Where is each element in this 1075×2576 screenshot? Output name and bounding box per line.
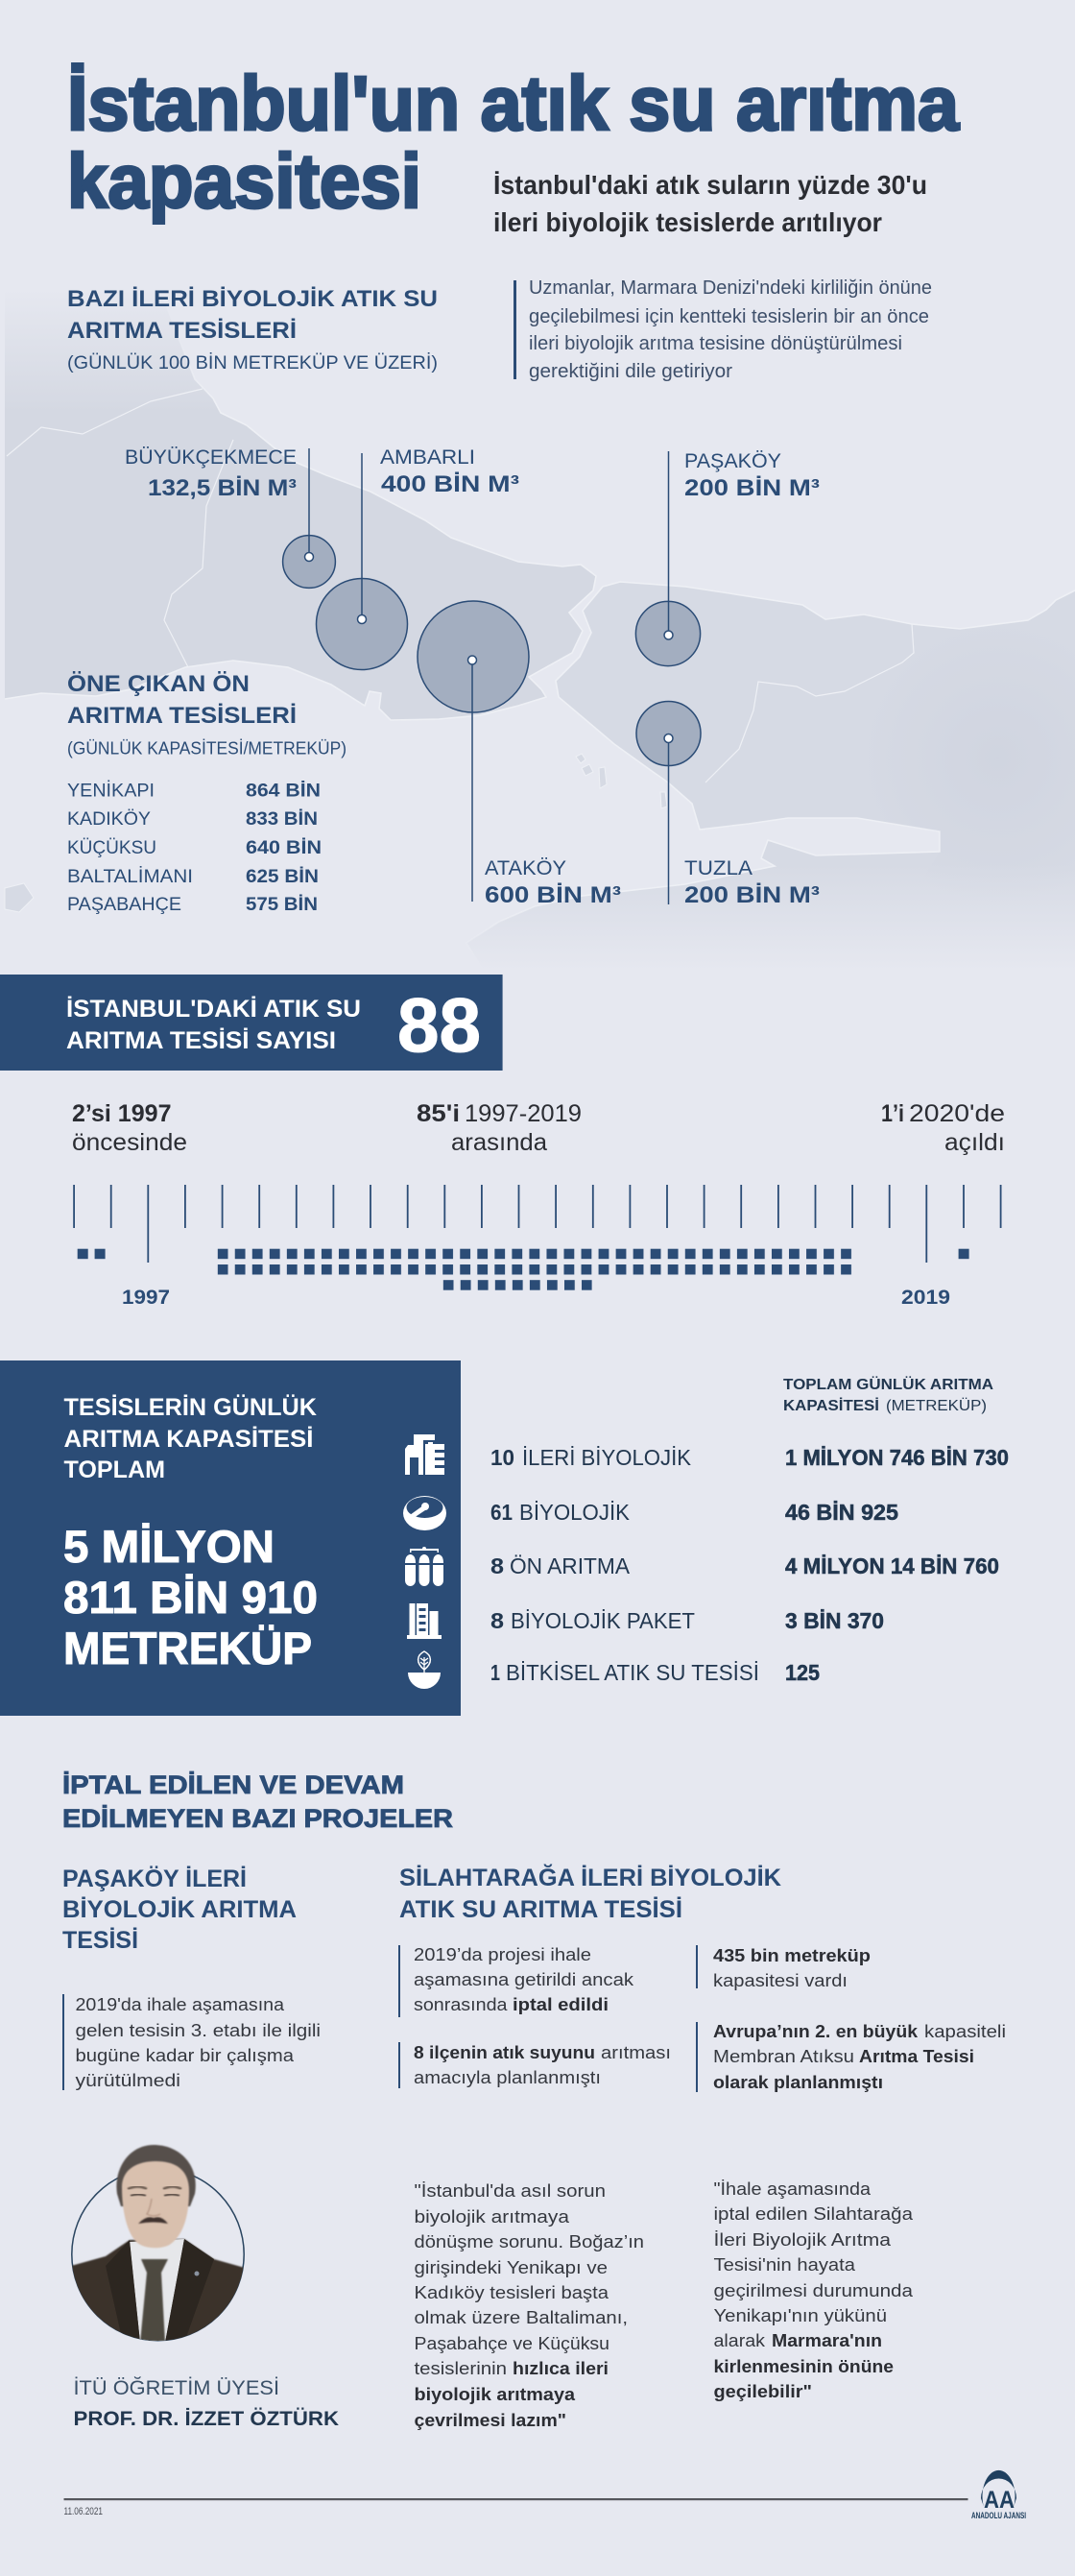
timeline ticks	[74, 1185, 1001, 1263]
note: cancelled tender: 2019’da projesi ihale	[414, 1945, 591, 1964]
timeline captions: 2020'de	[909, 1100, 1005, 1127]
quote 2	[714, 2179, 914, 2401]
marker: Ambarlı: 400 BİN M³	[381, 471, 519, 497]
quote 1: tesislerinin	[415, 2359, 507, 2378]
note: cancelled tender: aşamasına getirildi ancak	[414, 1970, 634, 1989]
quote 1	[415, 2181, 644, 2430]
person name: PROF. DR. İZZET ÖZTÜRK	[73, 2408, 339, 2430]
panel: Paşaköy project: 2019'da ihale aşamasına	[75, 1995, 285, 2014]
panel: pre-treatment plants: 864 BİN	[246, 782, 321, 801]
quote 1: çevrilmesi lazım"	[415, 2411, 566, 2430]
table row values: 1 MİLYON 746 BİN 730	[785, 1445, 1009, 1470]
callout: experts paragraph	[514, 277, 932, 382]
panel: pre-treatment plants: 833 BİN	[246, 809, 318, 830]
note: capacity: kapasitesi vardı	[713, 1971, 848, 1990]
panel: total daily capacity: TESİSLERİN GÜNLÜK	[63, 1393, 317, 1421]
note: Europe's second largest: kapasiteli	[924, 2022, 1006, 2041]
heading: cancelled projects	[62, 1770, 453, 1833]
timeline	[72, 1100, 1005, 1309]
table header: (METREKÜP)	[886, 1397, 987, 1414]
panel: Paşaköy project: BİYOLOJİK ARITMA	[62, 1896, 297, 1923]
panel: pre-treatment plants: ARITMA TESİSLERİ	[67, 703, 297, 729]
quote 1: dönüşme sorunu. Boğaz’ın	[415, 2232, 644, 2251]
table row labels: İLERİ BİYOLOJİK	[522, 1445, 692, 1470]
note: eight districts: amacıyla planlanmıştı	[414, 2068, 601, 2087]
heading: advanced biological plants	[67, 286, 438, 373]
quote 2: Tesisi'nin hayata	[714, 2255, 856, 2275]
note: Europe's second largest: Arıtma Tesisi	[859, 2047, 974, 2066]
note: Europe's second largest: Avrupa’nın 2. en büyük	[713, 2022, 919, 2041]
marker: Ataköy: ATAKÖY	[485, 857, 566, 879]
panel: total daily capacity: ARITMA KAPASİTESİ	[63, 1426, 313, 1453]
timeline captions: 2’si 1997	[72, 1100, 171, 1127]
note: eight districts: arıtması	[601, 2043, 671, 2062]
panel: Silahtarağa project: ATIK SU ARITMA TESİSİ	[399, 1896, 682, 1923]
table row values: 3 BİN 370	[785, 1608, 884, 1633]
panel: number of plants banner: İSTANBUL'DAKİ ATIK SU	[66, 996, 361, 1023]
marker: Paşaköy: 200 BİN M³	[684, 475, 820, 501]
panel: pre-treatment plants: (GÜNLÜK KAPASİTESİ/METREKÜP)	[67, 739, 346, 758]
panel: Paşaköy project: TESİSİ	[62, 1927, 138, 1954]
panel: Paşaköy project: bugüne kadar bir çalışma	[75, 2046, 295, 2065]
callout: experts paragraph: gerektiğini dile getiriyor	[529, 361, 732, 382]
table: plant types and capacities	[490, 1375, 1009, 1685]
note: eight districts: 8 ilçenin atık suyunu	[414, 2043, 595, 2062]
marker: Ambarlı: AMBARLI	[380, 446, 475, 469]
icon: biological package plant	[407, 1603, 442, 1639]
note: eight districts	[398, 2042, 671, 2088]
panel: total daily capacity: METREKÜP	[63, 1623, 312, 1673]
quote 1: "İstanbul'da asıl sorun	[415, 2181, 606, 2201]
note: cancelled tender: iptal edildi	[513, 1995, 609, 2014]
table row labels: BİTKİSEL ATIK SU TESİSİ	[506, 1660, 759, 1685]
quote 2: İleri Biyolojik Arıtma	[714, 2230, 892, 2250]
marker: Büyükçekmece	[125, 446, 335, 588]
marker: Tuzla: 200 BİN M³	[684, 882, 820, 908]
quote 2: geçirilmesi durumunda	[714, 2281, 914, 2300]
person name	[73, 2377, 339, 2430]
subtitle: ileri biyolojik tesislerde arıtılıyor	[493, 207, 882, 237]
marker: Paşaköy	[635, 450, 820, 666]
table row labels: 8	[490, 1608, 504, 1633]
heading: advanced biological plants: ARITMA TESİSLERİ	[67, 318, 297, 344]
person name: İTÜ ÖĞRETİM ÜYESİ	[73, 2377, 279, 2399]
panel: pre-treatment plants: ÖNE ÇIKAN ÖN	[67, 671, 250, 697]
panel: total daily capacity: 5 MİLYON	[63, 1521, 275, 1572]
panel: number of plants banner	[0, 975, 503, 1071]
timeline captions: 1997-2019	[465, 1100, 582, 1127]
table row labels: 61	[490, 1500, 513, 1525]
panel: number of plants banner: 88	[397, 982, 481, 1068]
logo: Anadolu Ajansı: ANADOLU AJANSI	[971, 2511, 1026, 2520]
panel: pre-treatment plants: PAŞABAHÇE	[67, 895, 181, 915]
table row values	[785, 1445, 1009, 1685]
panel: total daily capacity	[0, 1360, 461, 1716]
note: cancelled tender: sonrasında	[414, 1995, 509, 2014]
quote 2: "İhale aşamasında	[714, 2179, 872, 2199]
callout: experts paragraph: Uzmanlar, Marmara Denizi'ndeki kirliliğin önüne	[529, 277, 932, 299]
timeline years: 2019	[901, 1287, 950, 1309]
table row labels: ÖN ARITMA	[510, 1553, 631, 1578]
quote 1: hızlıca ileri	[513, 2359, 609, 2378]
callout: experts paragraph: ileri biyolojik arıtma tesisine dönüştürülmesi	[529, 333, 902, 354]
quote 1: Paşabahçe ve Küçüksu	[415, 2334, 609, 2353]
icon: advanced biological plant	[405, 1434, 444, 1475]
quote 2: geçilebilir"	[714, 2382, 812, 2401]
table row labels: 10	[490, 1445, 514, 1470]
table row labels: 1	[490, 1660, 500, 1685]
timeline captions: 85'i	[417, 1100, 460, 1127]
table header: KAPASİTESİ	[783, 1397, 879, 1414]
timeline years: 1997	[122, 1287, 170, 1309]
title	[67, 60, 959, 224]
timeline captions: arasında	[451, 1129, 547, 1156]
quote 1: girişindeki Yenikapı ve	[415, 2258, 608, 2277]
table header	[783, 1375, 993, 1414]
quote 2: Yenikapı'nın yükünü	[714, 2306, 887, 2325]
marker: Tuzla: TUZLA	[684, 857, 752, 879]
panel: Silahtarağa project: SİLAHTARAĞA İLERİ BİYOLOJİK	[399, 1864, 781, 1891]
footer rule	[63, 2498, 968, 2500]
heading: cancelled projects: EDİLMEYEN BAZI PROJELER	[62, 1804, 453, 1833]
quote 2: kirlenmesinin önüne	[714, 2357, 894, 2376]
icon: pre-treatment tanks	[405, 1547, 443, 1586]
panel: pre-treatment plants	[67, 671, 346, 915]
logo: Anadolu Ajansı	[971, 2470, 1026, 2520]
heading: cancelled projects: İPTAL EDİLEN VE DEVAM	[62, 1770, 404, 1799]
map of Istanbul	[5, 288, 1075, 972]
panel: total daily capacity: 811 BİN 910	[63, 1572, 318, 1623]
icon: plant-based treatment	[408, 1651, 441, 1689]
table row values: 125	[785, 1660, 820, 1685]
callout: experts paragraph: geçilebilmesi için kentteki tesislerin bir an önce	[529, 306, 929, 327]
table header: TOPLAM GÜNLÜK ARITMA	[783, 1375, 993, 1393]
quote 1: biyolojik arıtmaya	[415, 2385, 576, 2404]
panel: pre-treatment plants: KADIKÖY	[67, 809, 151, 830]
quote 2: Marmara'nın	[772, 2331, 882, 2350]
note: Europe's second largest: Membran Atıksu	[713, 2047, 854, 2066]
quote 2: alarak	[714, 2331, 766, 2350]
table row labels: BİYOLOJİK	[519, 1500, 631, 1525]
timeline years	[122, 1287, 950, 1309]
panel: total daily capacity: TOPLAM	[63, 1457, 165, 1483]
quote 2: iptal edilen Silahtarağa	[714, 2204, 914, 2224]
icon: circular clarifier	[403, 1496, 446, 1530]
timeline captions	[72, 1100, 1005, 1156]
note: capacity: 435 bin metreküp	[713, 1946, 871, 1965]
panel: Paşaköy project: gelen tesisin 3. etabı ile ilgili	[75, 2021, 321, 2040]
panel: pre-treatment plants: YENİKAPI	[67, 782, 155, 801]
portrait of Prof. Dr. İzzet Öztürk	[67, 2145, 250, 2347]
note: Europe's second largest: olarak planlanmıştı	[713, 2073, 883, 2092]
title: kapasitesi	[67, 138, 421, 224]
panel: pre-treatment plants: KÜÇÜKSU	[67, 838, 156, 858]
panel: Paşaköy project: PAŞAKÖY İLERİ	[62, 1865, 247, 1892]
quote 1: olmak üzere Baltalimanı,	[415, 2308, 628, 2327]
heading: advanced biological plants: BAZI İLERİ BİYOLOJİK ATIK SU	[67, 286, 438, 312]
panel: Paşaköy project	[62, 1865, 321, 2090]
marker: Tuzla	[636, 701, 820, 908]
marker: Büyükçekmece: BÜYÜKÇEKMECE	[125, 446, 297, 469]
subtitle: İstanbul'daki atık suların yüzde 30'u	[493, 170, 927, 200]
note: cancelled tender	[398, 1945, 634, 2017]
table row labels: 8	[490, 1553, 504, 1578]
table row values: 46 BİN 925	[785, 1500, 898, 1525]
panel: pre-treatment plants: 575 BİN	[246, 895, 318, 915]
logo: Anadolu Ajansı: AA	[984, 2487, 1015, 2514]
quote 1: Kadıköy tesisleri başta	[415, 2283, 609, 2302]
subtitle	[493, 170, 927, 237]
quote 1: biyolojik arıtmaya	[415, 2207, 570, 2227]
panel: pre-treatment plants: BALTALİMANI	[67, 867, 193, 887]
marker: Paşaköy: PAŞAKÖY	[684, 450, 781, 472]
marker: Ambarlı	[317, 446, 519, 670]
panel: Paşaköy project: yürütülmedi	[75, 2071, 180, 2090]
panel: pre-treatment plants: 640 BİN	[246, 838, 322, 858]
marker: Ataköy	[418, 601, 621, 908]
note: Europe's second largest	[696, 2022, 1006, 2092]
table row labels: BİYOLOJİK PAKET	[511, 1608, 695, 1633]
marker: Büyükçekmece: 132,5 BİN M³	[148, 475, 297, 501]
panel: pre-treatment plants: 625 BİN	[246, 867, 319, 887]
panel: Silahtarağa project	[398, 1864, 1006, 2092]
note: capacity	[696, 1945, 871, 1990]
date: 11.06.2021	[63, 2506, 103, 2517]
panel: number of plants banner: ARITMA TESİSİ SAYISI	[66, 1027, 336, 1054]
marker: Ataköy: 600 BİN M³	[485, 882, 621, 908]
timeline captions: açıldı	[944, 1129, 1005, 1156]
timeline plant squares	[78, 1249, 969, 1290]
timeline captions: öncesinde	[72, 1129, 187, 1156]
table row values: 4 MİLYON 14 BİN 760	[785, 1553, 999, 1578]
table row labels	[490, 1445, 759, 1685]
timeline captions: 1’i	[881, 1100, 904, 1127]
title: İstanbul'un atık su arıtma	[67, 60, 959, 146]
heading: advanced biological plants: (GÜNLÜK 100 BİN METREKÜP VE ÜZERİ)	[67, 353, 438, 373]
